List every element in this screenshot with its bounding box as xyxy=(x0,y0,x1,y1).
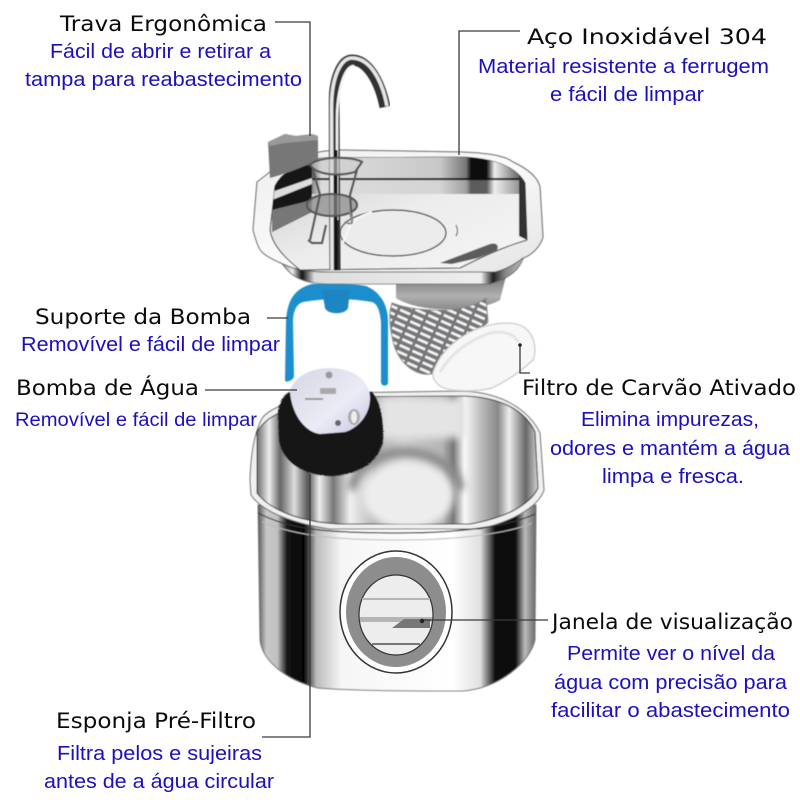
label: Aço Inoxidável 304: Material resistente a ferrugem xyxy=(478,56,769,78)
label: Suporte da Bomba: Removível e fácil de limpar xyxy=(21,334,280,356)
label: Filtro de Carvão Ativado: limpa e fresca. xyxy=(602,466,744,488)
label: Esponja Pré-Filtro xyxy=(44,709,274,793)
round plate on tray xyxy=(340,210,458,256)
bowl body xyxy=(250,391,544,691)
label: Trava Ergonômica: Trava Ergonômica xyxy=(59,12,267,37)
label: Janela de visualização: água com precisão para xyxy=(554,672,788,694)
label: Janela de visualização: Janela de visualização xyxy=(550,610,793,635)
label: Suporte da Bomba: Suporte da Bomba xyxy=(35,305,251,330)
label: Janela de visualização xyxy=(550,610,793,722)
slot on tray xyxy=(440,243,498,264)
label: Trava Ergonômica: Fácil de abrir e retirar a xyxy=(50,41,272,63)
leader line: viewing window xyxy=(420,619,548,623)
label: Filtro de Carvão Ativado: Elimina impurezas, xyxy=(581,409,759,431)
illustration: water fountain exploded view xyxy=(250,58,544,691)
latch xyxy=(268,134,318,178)
faucet valve cage xyxy=(307,158,362,243)
under-tray cylinder xyxy=(396,276,506,310)
label: Aço Inoxidável 304: Aço Inoxidável 304 xyxy=(527,25,767,50)
label: Esponja Pré-Filtro: Esponja Pré-Filtro xyxy=(56,709,256,734)
label: Filtro de Carvão Ativado xyxy=(522,376,796,488)
label: Trava Ergonômica: tampa para reabastecimento xyxy=(25,69,302,91)
label: Esponja Pré-Filtro: antes de a água circular xyxy=(44,771,274,793)
label: Aço Inoxidável 304 xyxy=(478,25,769,106)
label: Bomba de Água xyxy=(15,375,258,431)
label: Bomba de Água: Removível e fácil de limpar xyxy=(15,410,258,431)
label: Suporte da Bomba xyxy=(21,305,280,356)
leader line: pump support xyxy=(267,317,288,319)
white charcoal filter xyxy=(433,323,535,391)
leader line: latch xyxy=(275,22,310,136)
sponge xyxy=(278,390,383,476)
label: Trava Ergonômica xyxy=(25,12,302,91)
leader line: carbon filter xyxy=(518,343,530,373)
leader line: stainless steel xyxy=(459,31,520,155)
water pump xyxy=(278,368,383,476)
bowl rim and interior xyxy=(250,391,544,540)
pre-filter basket xyxy=(390,298,488,374)
label: Janela de visualização: Permite ver o nível da xyxy=(567,643,776,665)
label: Filtro de Carvão Ativado: Filtro de Carvão Ativado xyxy=(522,376,796,401)
pump head xyxy=(290,368,370,434)
label: Filtro de Carvão Ativado: odores e mantém a água xyxy=(550,438,791,460)
label: Esponja Pré-Filtro: Filtra pelos e sujeiras xyxy=(57,743,262,765)
label: Aço Inoxidável 304: e fácil de limpar xyxy=(550,84,704,106)
leader line: sponge xyxy=(262,474,310,737)
label: Janela de visualização: facilitar o abastecimento xyxy=(551,700,790,722)
steel tray xyxy=(253,150,543,284)
viewing window xyxy=(340,551,452,673)
leader line: water pump xyxy=(205,389,297,391)
faucet xyxy=(332,58,387,270)
blue pump support xyxy=(285,283,388,386)
label: Bomba de Água: Bomba de Água xyxy=(16,375,199,401)
